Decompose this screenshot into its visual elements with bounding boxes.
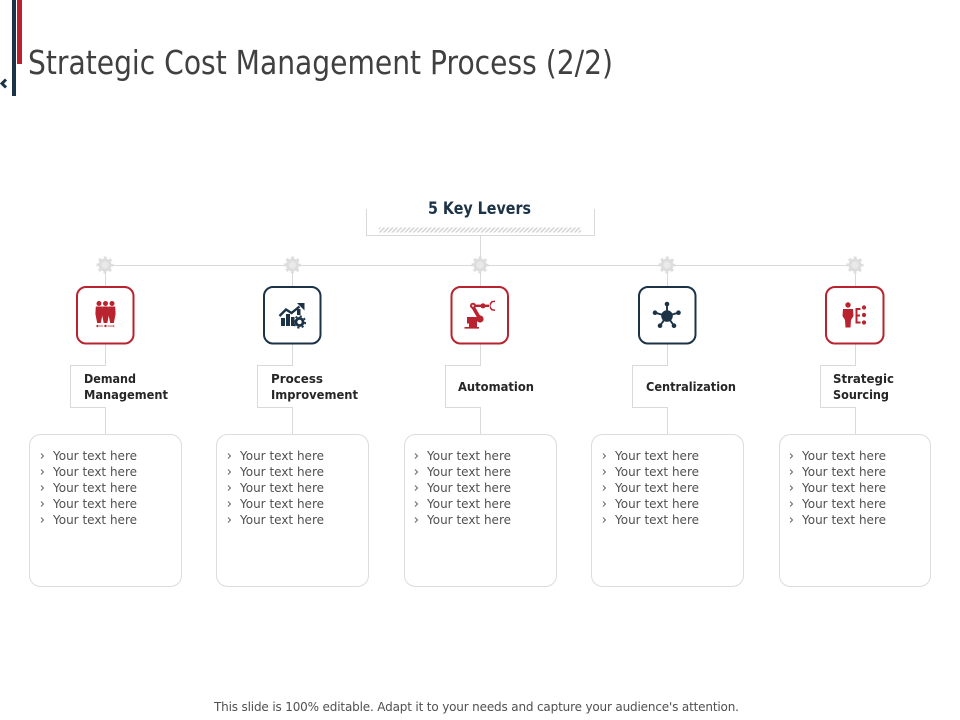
gear node 3 xyxy=(473,258,487,272)
label 2 xyxy=(271,371,358,402)
icon: robot arm xyxy=(464,301,495,329)
icon box 3 xyxy=(452,287,508,344)
card 4: Your text here xyxy=(614,449,699,463)
gear node 2 xyxy=(285,258,300,272)
card 3: Your text here xyxy=(426,481,511,495)
card 3: Your text here xyxy=(426,465,511,479)
label 5: Sourcing xyxy=(833,387,889,402)
connector tree xyxy=(105,209,855,287)
card 1: Your text here xyxy=(52,465,137,479)
card 2 xyxy=(216,434,368,586)
card 1: Your text here xyxy=(52,481,137,495)
card 1: Your text here xyxy=(52,513,137,527)
card 2: Your text here xyxy=(239,465,324,479)
label 5: Strategic xyxy=(833,371,894,386)
card 1 xyxy=(30,434,182,586)
icon box 4 xyxy=(639,287,696,344)
card 4: Your text here xyxy=(614,465,699,479)
card 5: Your text here xyxy=(801,481,886,495)
icon: hub network xyxy=(653,302,681,328)
label 4: Centralization xyxy=(646,379,736,394)
card 1: Your text here xyxy=(52,449,137,463)
card 5 xyxy=(780,434,930,586)
icon: people xyxy=(95,301,116,328)
card 1: Your text here xyxy=(52,497,137,511)
label 2: Process xyxy=(271,371,323,386)
heading: 5 Key Levers xyxy=(379,199,581,232)
label 5 xyxy=(833,371,894,402)
card 5: Your text here xyxy=(801,497,886,511)
label 2: Improvement xyxy=(271,387,358,402)
label 3: Automation xyxy=(458,379,534,394)
footer note: This slide is 100% editable. Adapt it to your needs and capture your audience's attention. xyxy=(213,700,739,714)
card 5: Your text here xyxy=(801,513,886,527)
card 4 xyxy=(592,434,744,586)
card 4: Your text here xyxy=(614,497,699,511)
card 5: Your text here xyxy=(801,449,886,463)
card 3: Your text here xyxy=(426,513,511,527)
column 3: Automation xyxy=(404,258,556,586)
column 2: Process Improvement xyxy=(216,258,368,586)
card 4: Your text here xyxy=(614,481,699,495)
icon box 1 xyxy=(77,287,134,344)
label 1: Management xyxy=(84,387,168,402)
title: Strategic Cost Management Process (2/2) xyxy=(28,43,613,82)
card 2: Your text here xyxy=(239,449,324,463)
gear node 1 xyxy=(98,258,112,272)
card 4: Your text here xyxy=(614,513,699,527)
card 5: Your text here xyxy=(801,465,886,479)
icon: person with list xyxy=(842,302,866,328)
column 1: Demand Management xyxy=(30,258,182,586)
card 3: Your text here xyxy=(426,449,511,463)
heading: 5 Key Levers: 5 Key Levers xyxy=(428,199,531,218)
header accent bars xyxy=(12,0,22,96)
icon box 5 xyxy=(826,287,884,344)
label 1: Demand xyxy=(84,371,136,386)
back chevron xyxy=(2,80,6,88)
card 2: Your text here xyxy=(239,481,324,495)
icon: chart and gear xyxy=(280,303,305,328)
column 4: Centralization xyxy=(592,258,744,586)
column 5: Strategic Sourcing xyxy=(780,258,930,586)
card 2: Your text here xyxy=(239,513,324,527)
icon box 2 xyxy=(264,287,320,344)
gear node 4 xyxy=(660,258,674,272)
gear node 5 xyxy=(848,258,862,272)
card 2: Your text here xyxy=(239,497,324,511)
label 1 xyxy=(84,371,168,402)
card 3: Your text here xyxy=(426,497,511,511)
card 3 xyxy=(404,434,556,586)
